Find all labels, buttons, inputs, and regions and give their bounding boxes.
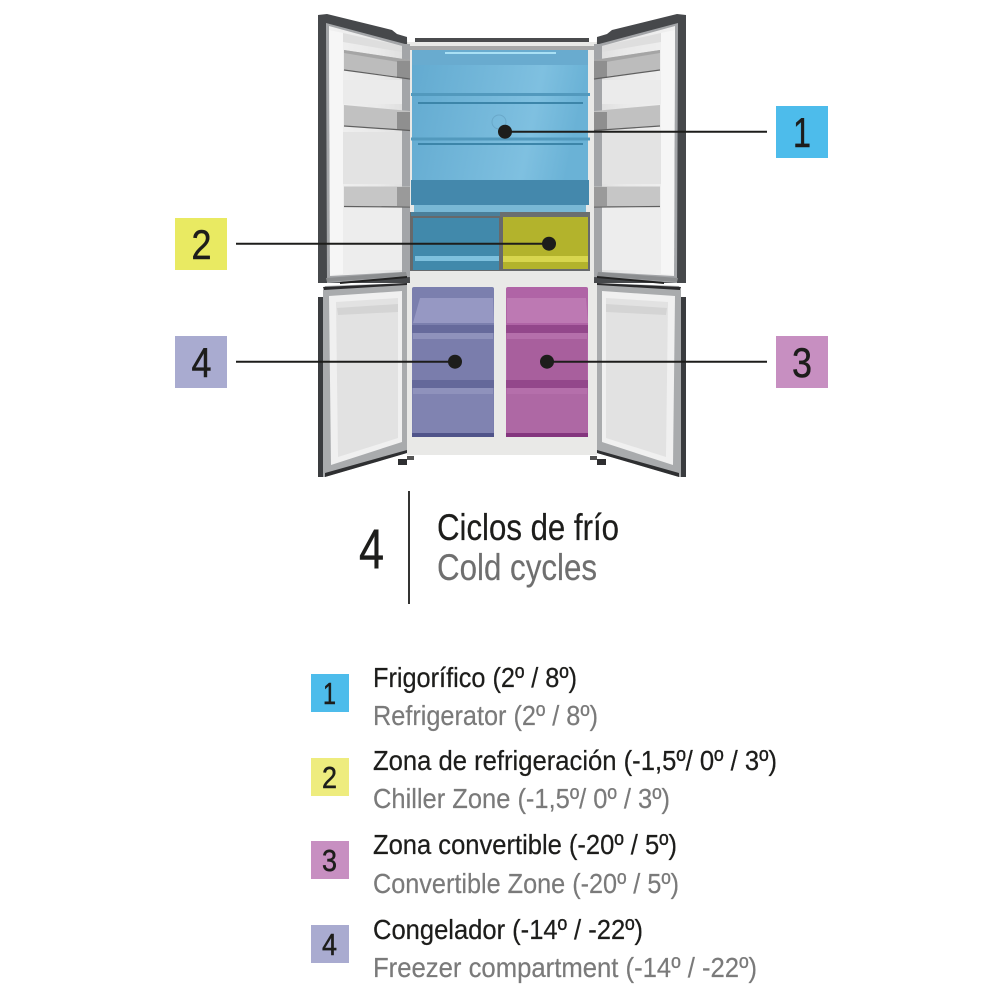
legend row 4: 4 <box>322 927 337 962</box>
legend row 2 <box>311 745 777 814</box>
panel: refrigerator illustration <box>318 14 686 477</box>
callout 2: 2 <box>192 221 212 268</box>
callout 4: 4 <box>192 339 212 386</box>
legend row 1: 1 <box>323 676 336 711</box>
heading: cold cycles <box>359 491 619 604</box>
heading spanish: Ciclos de frío <box>437 507 619 548</box>
lower left door <box>318 283 414 477</box>
zone 3: convertible compartment <box>506 287 588 437</box>
callout 1 <box>498 106 828 158</box>
zone 2: chiller drawer <box>500 212 590 269</box>
legend <box>311 662 777 983</box>
legend row 3: 3 <box>322 843 337 878</box>
upper left door <box>318 14 410 284</box>
legend row 1 <box>311 662 598 731</box>
legend row 2: Zona de refrigeración (-1,5º/ 0º / 3º) <box>373 745 777 776</box>
cycle count number: 4 <box>359 517 384 580</box>
legend row 3 <box>311 829 679 899</box>
upper right door <box>594 14 686 284</box>
legend row 1: Refrigerator (2º / 8º) <box>373 700 598 731</box>
callout 3 <box>540 336 828 388</box>
legend row 3: Zona convertible (-20º / 5º) <box>373 829 677 860</box>
zone 1: refrigerator compartment <box>411 50 590 270</box>
heading english: Cold cycles <box>437 547 597 588</box>
legend row 2: 2 <box>322 760 337 795</box>
callout 2 <box>175 218 556 270</box>
lower right door <box>590 283 686 477</box>
cabinet body <box>407 42 597 455</box>
callout 1: 1 <box>793 109 811 156</box>
legend row 1: Frigorífico (2º / 8º) <box>373 662 577 693</box>
legend row 4: Freezer compartment (-14º / -22º) <box>373 952 757 983</box>
callout 3: 3 <box>792 339 812 386</box>
cabinet top edge <box>415 38 589 42</box>
legend row 4 <box>311 914 757 983</box>
legend row 2: Chiller Zone (-1,5º/ 0º / 3º) <box>373 783 670 814</box>
legend row 4: Congelador (-14º / -22º) <box>373 914 643 945</box>
zone 4: freezer compartment <box>412 287 494 437</box>
drawer frame <box>410 212 590 271</box>
callout 4 <box>175 336 462 388</box>
legend row 3: Convertible Zone (-20º / 5º) <box>373 868 679 899</box>
